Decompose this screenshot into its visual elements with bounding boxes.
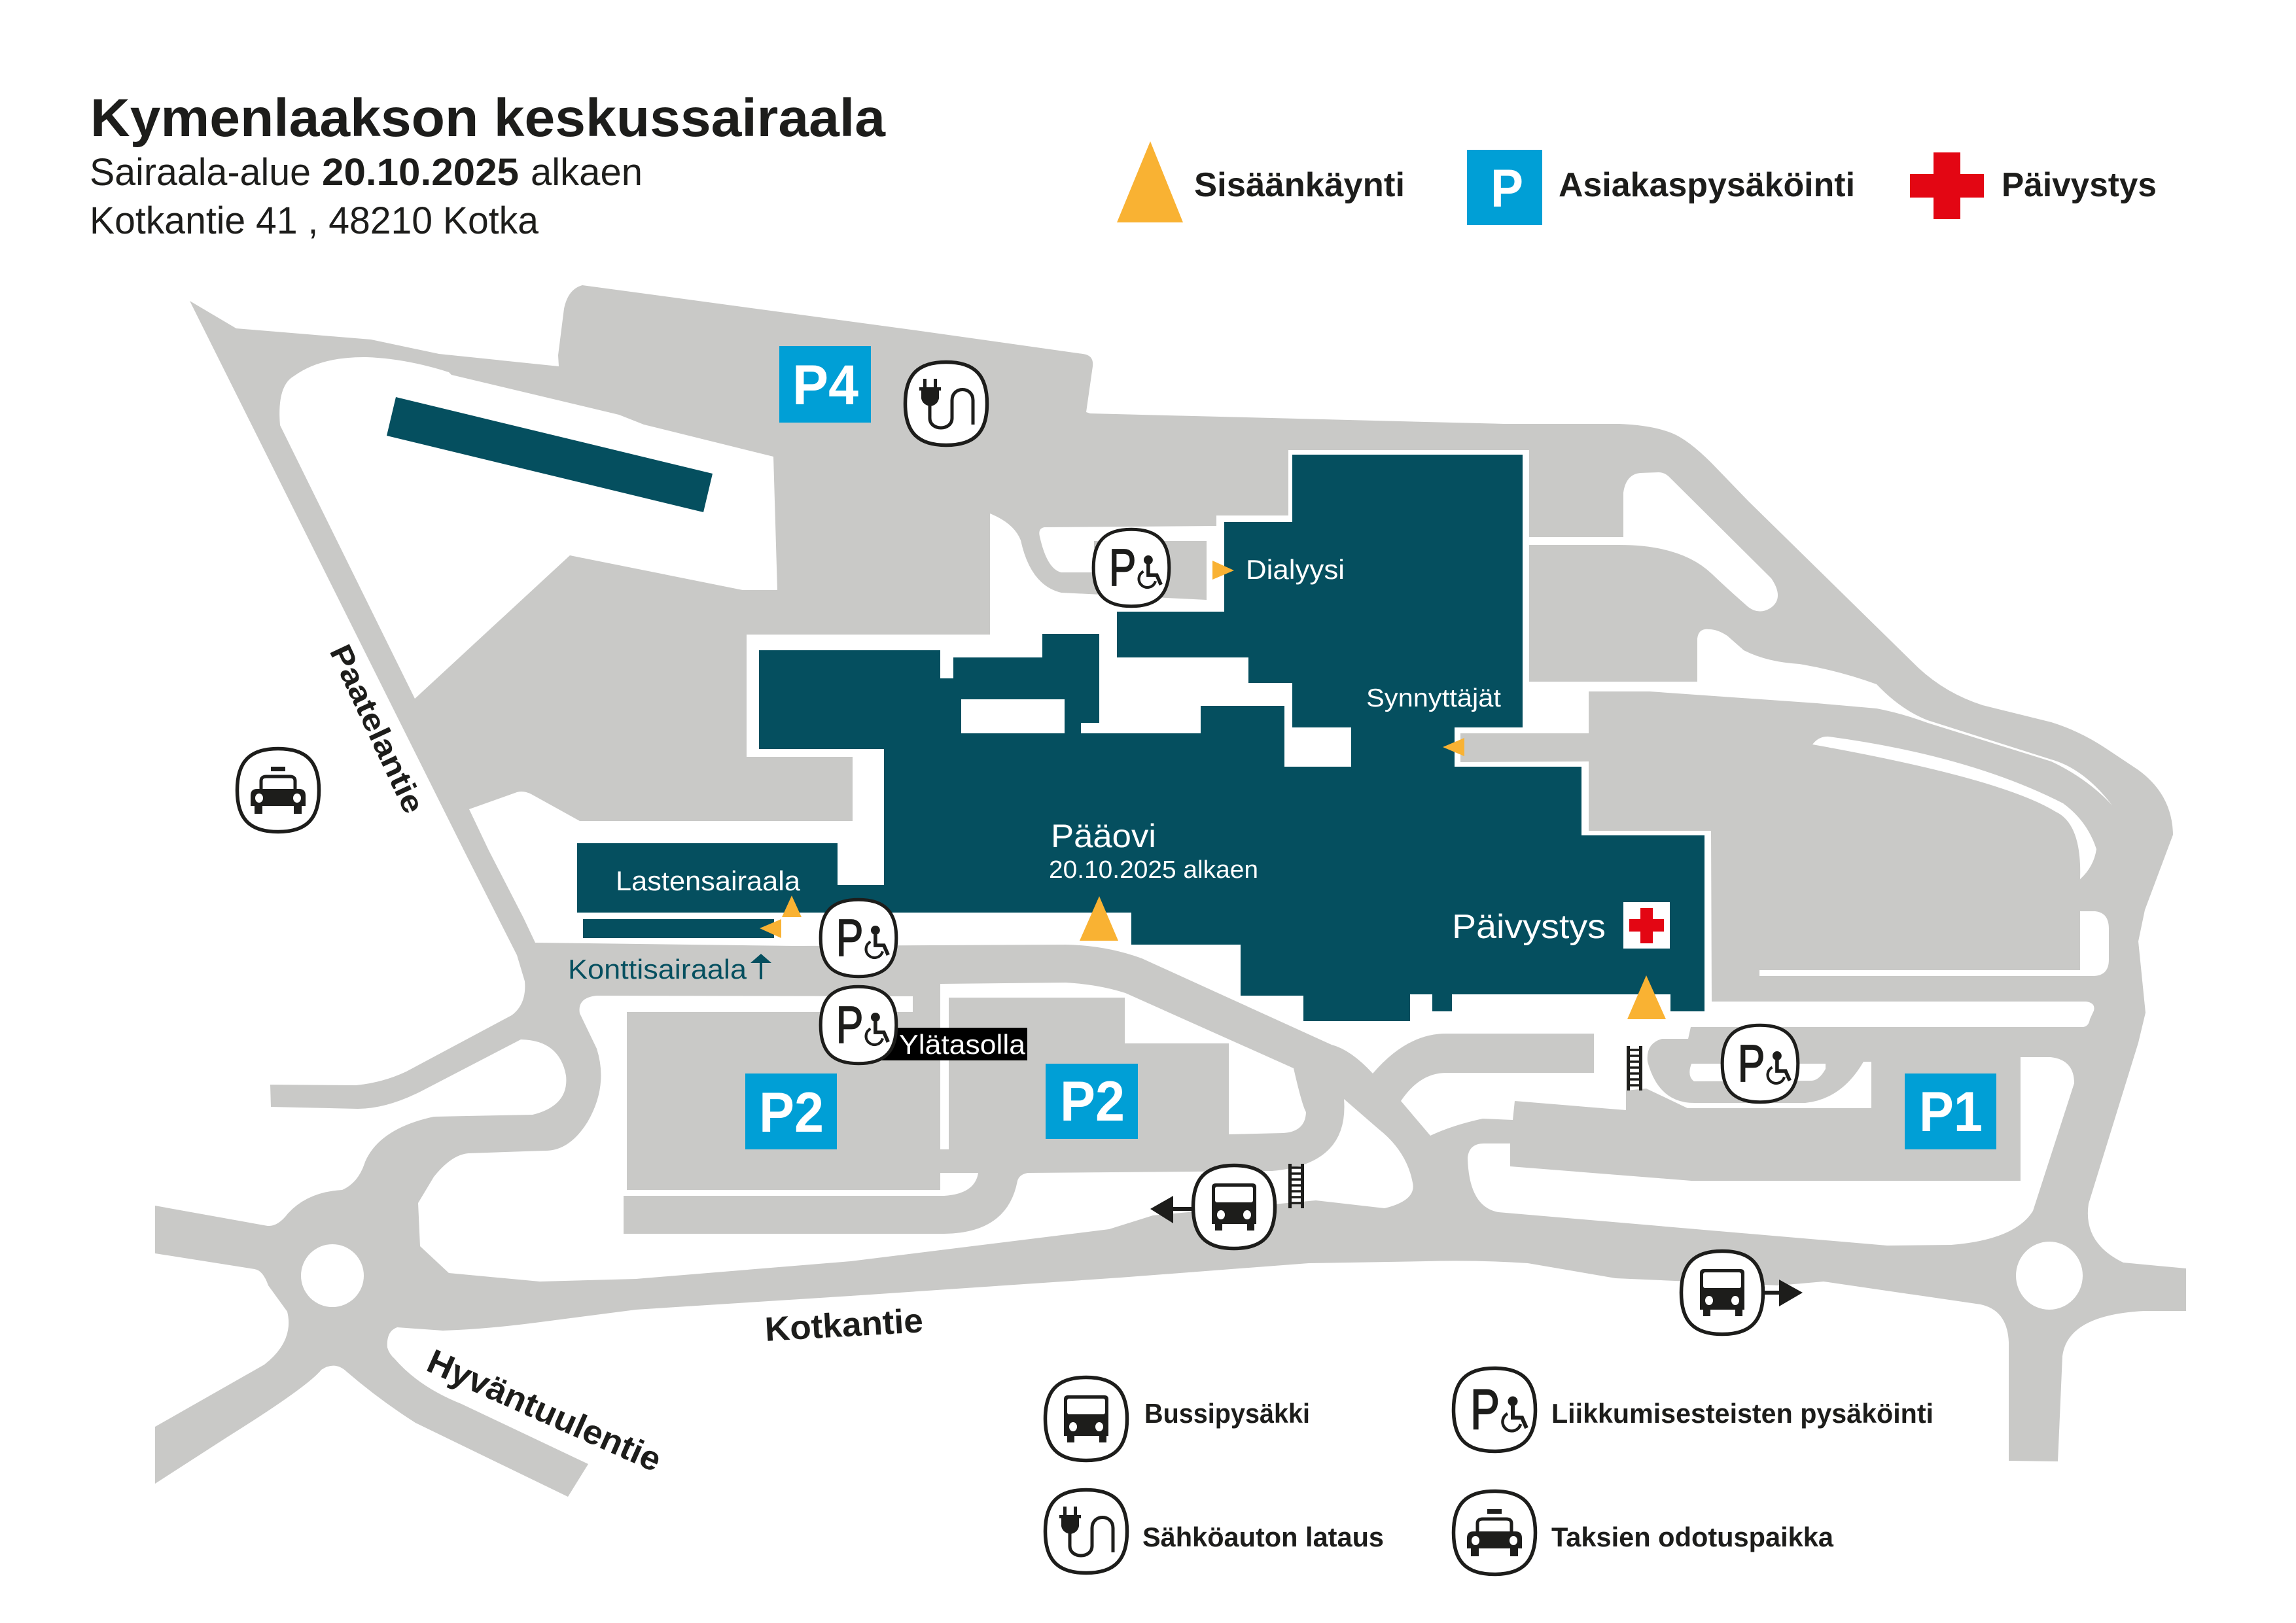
road and parking network	[155, 285, 2186, 1497]
label: Synnyttäjät: Synnyttäjät	[1366, 684, 1501, 712]
legend: emergency: Päivystys	[2002, 166, 2157, 204]
parking sign: P1: P1	[1919, 1081, 1983, 1143]
legend: EV charging	[1046, 1490, 1384, 1573]
title: Kymenlaakson keskussairaala	[90, 88, 886, 148]
icon: accessible parking by main door	[821, 899, 896, 977]
subtitle date line: 20.10.2025	[322, 151, 519, 194]
label: Konttisairaala with arrow: Konttisairaala	[568, 954, 747, 985]
icon: accessible parking by Dialyysi: P	[1109, 538, 1136, 597]
label: Pääovi date: 20.10.2025 alkaen	[1049, 856, 1258, 884]
icon: bus stop west	[1193, 1166, 1275, 1248]
entrance markers	[760, 561, 1666, 1019]
parking sign: P2 left	[745, 1073, 837, 1149]
legend: accessible parking: Liikkumisesteisten pysäköinti	[1551, 1398, 1934, 1429]
icon: EV charging at P4	[906, 362, 987, 445]
legend: bus stop: Bussipysäkki	[1144, 1398, 1310, 1429]
label: Dialyysi: Dialyysi	[1246, 554, 1345, 585]
subtitle date line	[90, 151, 643, 194]
legend: customer parking: Asiakaspysäköinti	[1559, 166, 1855, 204]
icon: emergency cross	[1623, 902, 1670, 949]
legend: customer parking	[1467, 150, 1855, 225]
icon: accessible parking by Dialyysi	[1093, 529, 1169, 606]
street label: Kotkantie: Kotkantie	[764, 1302, 924, 1349]
arrow: bus stop direction west	[1150, 1196, 1194, 1223]
icon: bus stop east	[1682, 1251, 1763, 1335]
callout: Ylätasolla: Ylätasolla	[899, 1029, 1026, 1060]
title block	[90, 88, 886, 242]
subtitle date line: Sairaala-alue	[90, 151, 311, 194]
legend: accessible parking	[1454, 1369, 1934, 1451]
icon: accessible parking upper level: P	[836, 996, 863, 1054]
top legend	[1117, 141, 2157, 225]
building: Konttisairaala	[583, 919, 774, 938]
legend: EV charging: Sähköauton lataus	[1142, 1522, 1384, 1552]
legend: bus stop	[1046, 1378, 1310, 1460]
building: main hospital	[759, 455, 1704, 1021]
icon: accessible parking by P1: P	[1738, 1034, 1765, 1092]
street label: Paatelantie: Paatelantie	[323, 639, 431, 818]
legend: entrance: Sisäänkäynti	[1194, 166, 1405, 204]
legend: taxi: Taksien odotuspaikka	[1551, 1522, 1834, 1552]
icon: stairs by emergency entrance	[1627, 1046, 1642, 1091]
parking sign: P2 right: P2	[1060, 1070, 1125, 1133]
legend: taxi	[1454, 1492, 1834, 1574]
legend: customer parking: P	[1491, 159, 1523, 218]
bottom legend	[1046, 1369, 1934, 1574]
open areas between roads	[279, 357, 2112, 1310]
label: Pääovi: Pääovi	[1051, 818, 1156, 854]
building: Lastensairaala	[577, 843, 884, 913]
parking sign: P4	[779, 346, 871, 423]
street label: Hyväntuulentie: Hyväntuulentie	[421, 1342, 667, 1480]
subtitle date line: alkaen	[531, 151, 643, 194]
arrow: bus stop direction east	[1761, 1280, 1803, 1306]
label: Päivystys: Päivystys	[1452, 908, 1606, 946]
legend: emergency	[1910, 152, 2157, 219]
legend: entrance	[1117, 141, 1405, 222]
address: Kotkantie 41 , 48210 Kotka	[90, 200, 539, 242]
building: Lastensairaala: Lastensairaala	[616, 865, 801, 896]
legend: accessible parking: P	[1470, 1378, 1500, 1441]
icon: accessible parking by main door: P	[836, 909, 863, 967]
building: northwest wing	[387, 397, 713, 512]
parking sign: P1	[1905, 1073, 1996, 1149]
icon: taxi stand	[237, 748, 319, 832]
icon: accessible parking upper level	[821, 986, 896, 1064]
parking sign: P2 left: P2	[759, 1081, 824, 1144]
icon: accessible parking by P1	[1722, 1025, 1798, 1102]
icon: stairs by bus stop	[1288, 1164, 1304, 1208]
parking sign: P4: P4	[792, 354, 858, 417]
parking sign: P2 right	[1046, 1064, 1138, 1139]
